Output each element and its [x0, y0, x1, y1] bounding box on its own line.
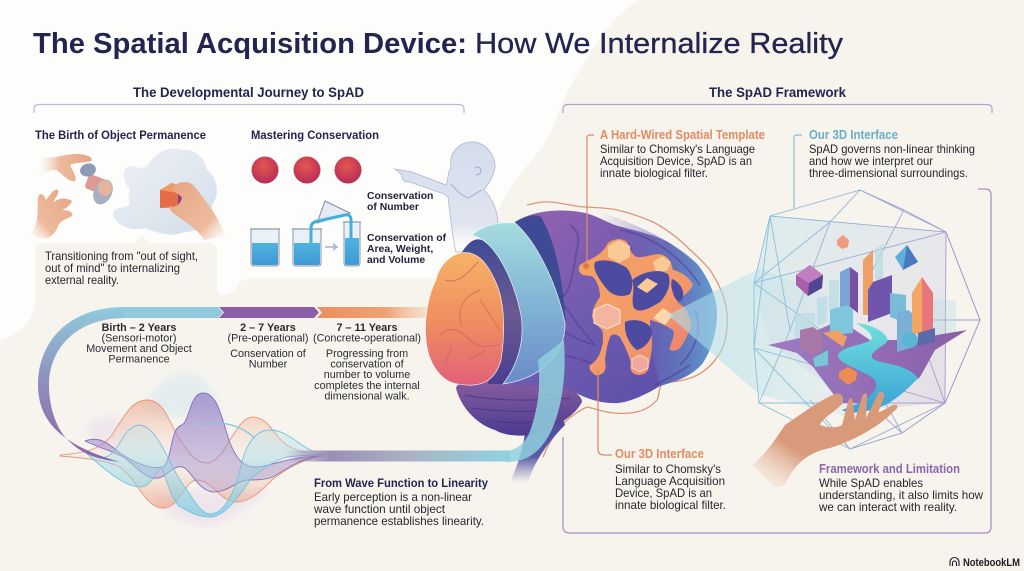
timeline label: birth to 2 years: (Sensori-motor) [102, 332, 176, 344]
text: conservation of number [367, 191, 433, 213]
timeline label: 2 to 7 years [227, 322, 309, 370]
icon: child pointing [395, 142, 500, 252]
heading: mastering conservation: Mastering Conservation [251, 128, 379, 142]
interior shading [754, 216, 946, 410]
timeline label: 7 to 11 years: completes the internal [314, 380, 420, 392]
heading: developmental journey: The Developmental Journey to SpAD [133, 84, 364, 100]
icon: cube [160, 183, 185, 208]
text: our 3D interface bottom: Our 3D Interface [615, 447, 704, 461]
text: conservation of area: and Volume [367, 255, 425, 266]
text: our 3D interface top: three-dimensional surroundings. [809, 166, 968, 180]
text: conservation of number: of Number [367, 202, 419, 213]
text: permanence caption: Transitioning from "out of sight, [45, 249, 198, 263]
ribbon: 7 to 11 years [317, 307, 432, 318]
ground [768, 320, 967, 403]
text: conservation of area: Area, Weight, [367, 244, 433, 255]
icon: cloud [113, 148, 217, 235]
bracket: developmental journey [34, 104, 464, 113]
floating diamond [895, 245, 918, 270]
ribbon: linear path [285, 450, 510, 462]
text: our 3D interface bottom: Device, SpAD is an [615, 486, 712, 500]
timeline label: 2 to 7 years: Number [249, 358, 288, 370]
timeline label: 7 to 11 years: conservation of [330, 358, 405, 370]
text: conservation of area: Conservation of [367, 233, 447, 244]
icon: beakers [250, 201, 361, 266]
text: our 3D interface top: Our 3D Interface [809, 128, 898, 142]
text: our 3D interface bottom: innate biological filter. [615, 498, 726, 512]
text: our 3D interface bottom: Language Acquisition [615, 474, 725, 488]
teal ribbon down [505, 340, 565, 462]
timeline label: 7 to 11 years: dimensional walk. [324, 390, 410, 402]
panel: mastering conservation [250, 128, 500, 266]
wave function [60, 372, 325, 526]
text: wave function to linearity: Early perception is a non-linear [314, 490, 472, 504]
line: hard-wired template connector [587, 135, 594, 262]
text: framework and limitation: Framework and Limitation [819, 462, 960, 476]
text: framework and limitation: While SpAD enables [819, 476, 923, 490]
neural network [579, 239, 693, 375]
cylinder dark inner [462, 239, 522, 384]
river [838, 323, 918, 412]
gyri lines [530, 225, 700, 385]
floating small cube [837, 235, 849, 249]
timeline label: 7 to 11 years [313, 322, 421, 402]
ribbon: birth to 2 years [38, 307, 125, 462]
icon: lower hand [30, 190, 72, 238]
text: our 3D interface top: and how we interpret our [809, 154, 933, 168]
text: our 3D interface bottom: Similar to Chomsky's [615, 462, 721, 476]
brain blue shade [600, 212, 717, 386]
title [33, 28, 844, 60]
ground cube [839, 367, 857, 385]
text: conservation of number: Conservation [367, 191, 433, 202]
text: hard-wired spatial template: A Hard-Wired Spatial Template [600, 128, 765, 142]
text: framework and limitation: we can interact with reality. [818, 500, 957, 514]
timeline label: birth to 2 years: Movement and Object [86, 343, 192, 355]
text: permanence caption: out of mind" to internalizing [45, 261, 180, 275]
text: framework and limitation: understanding, it also limits how [819, 488, 983, 502]
network holes [594, 260, 683, 350]
text: wave function to linearity: wave function until object [313, 502, 446, 516]
line: our 3D interface connector [794, 135, 802, 208]
text: permanence caption: external reality. [45, 273, 119, 287]
panel: object permanence [30, 128, 226, 287]
line: 3D interface lower connector [598, 370, 612, 455]
bracket: framework [563, 104, 992, 113]
heading: birth of object permanence: The Birth of Object Permanence [35, 128, 206, 142]
text: hard-wired spatial template: Similar to Chomsky's Language [600, 142, 755, 156]
icon: right hand [170, 182, 226, 240]
text: our 3D interface top [809, 128, 975, 180]
timeline label: 7 to 11 years: (Concrete-operational) [313, 332, 421, 344]
timeline label: birth to 2 years [86, 322, 192, 366]
timeline label: birth to 2 years: Permanence [108, 354, 170, 366]
icon: three balls [252, 156, 362, 184]
ribbon: 2 to 7 years [219, 307, 319, 318]
text: wave function to linearity: permanence establishes linearity. [314, 514, 484, 528]
text: permanence caption [45, 249, 198, 287]
buildings [800, 250, 935, 367]
text: conservation of area [367, 233, 447, 266]
text: hard-wired spatial template: Acquisition Device, SpAD is an [600, 154, 752, 168]
text: framework and limitation [818, 462, 983, 514]
wireframe [754, 190, 980, 449]
teal band [472, 223, 565, 384]
brain stem [510, 395, 565, 483]
hand [752, 392, 898, 488]
brain illustration [425, 210, 717, 483]
text: wave function to linearity: From Wave Function to Linearity [314, 476, 488, 490]
title: How We Internalize Reality [475, 28, 844, 60]
timeline ribbon [38, 307, 510, 462]
beam from brain [668, 268, 860, 420]
brain hemisphere [500, 210, 717, 403]
timeline label: 2 to 7 years: 2 – 7 Years [240, 322, 296, 334]
timeline label: 2 to 7 years: Conservation of [230, 348, 307, 360]
heading: framework: The SpAD Framework [709, 84, 846, 100]
polyhedron and city [668, 190, 980, 488]
cerebellum [456, 378, 582, 436]
floating cube purple [796, 265, 823, 296]
frontal lobe folds [440, 262, 500, 365]
icon: top hand [38, 154, 92, 181]
text: hard-wired spatial template [600, 128, 765, 180]
frontal lobe [425, 253, 504, 385]
title: The Spatial Acquisition Device: [33, 28, 467, 60]
frame: framework and limitation [563, 189, 991, 533]
text: our 3D interface top: SpAD governs non-linear thinking [809, 142, 975, 156]
text: our 3D interface bottom [615, 447, 726, 512]
timeline label: 7 to 11 years: Progressing from [326, 348, 408, 360]
cerebellum folds [465, 395, 570, 423]
text: hard-wired spatial template: innate biological filter. [600, 166, 708, 180]
outline around brain [527, 202, 727, 457]
navy crescent [515, 215, 566, 325]
timeline label: birth to 2 years: Birth – 2 Years [102, 322, 176, 334]
text: wave function to linearity [313, 476, 488, 528]
icon: toy [79, 162, 117, 208]
timeline label: 2 to 7 years: (Pre-operational) [227, 332, 309, 344]
background pale towers [795, 243, 956, 342]
timeline label: 7 to 11 years: 7 – 11 Years [336, 322, 398, 334]
timeline label: 7 to 11 years: number to volume [324, 369, 410, 381]
